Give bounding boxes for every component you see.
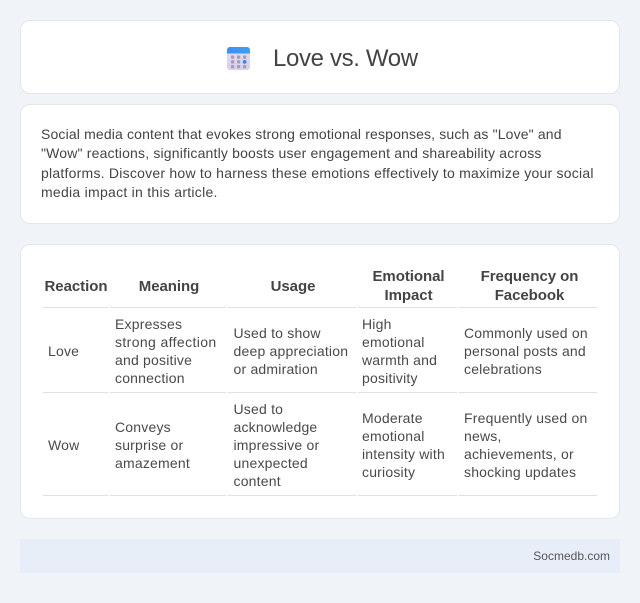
table row: Love: and positive — [115, 352, 192, 368]
table row: Wow: impressive or — [234, 437, 319, 453]
intro paragraph — [41, 126, 594, 200]
table row: Love: emotional — [362, 334, 425, 350]
intro paragraph: media impact in this article. — [41, 184, 218, 200]
intro paragraph: platforms. Discover how to harness these emotions effectively to maximize your social — [41, 165, 594, 181]
table row: Wow: news, — [464, 428, 502, 444]
table row: Wow: surprise or — [115, 437, 183, 453]
table row: Wow: Wow — [48, 437, 79, 453]
intro paragraph: Social media content that evokes strong emotional responses, such as "Love" and — [41, 126, 562, 142]
table header: Facebook — [495, 287, 564, 304]
table row: Wow: emotional — [362, 428, 425, 444]
icon: calendar — [227, 47, 250, 70]
table row: Wow: acknowledge — [234, 419, 317, 435]
table row: Love: Love — [48, 343, 79, 359]
table row: Wow: Frequently used on — [464, 410, 587, 426]
table row: Love: strong affection — [115, 334, 217, 350]
title: Love vs. Wow — [273, 45, 418, 72]
table row: Love: warmth and — [362, 352, 437, 368]
table row: Wow: unexpected — [234, 455, 308, 471]
table row: Wow: achievements, or — [464, 446, 574, 462]
table row: Love: connection — [115, 370, 185, 386]
table row: Wow: curiosity — [362, 464, 415, 480]
table row: Wow: intensity with — [362, 446, 445, 462]
table row: Wow: amazement — [115, 455, 190, 471]
panel: comparison table — [20, 244, 620, 519]
table row: Wow: Moderate — [362, 410, 423, 426]
table header — [45, 268, 578, 304]
panel: title card — [20, 20, 620, 94]
table row: Wow: Used to — [234, 401, 283, 417]
footer bar — [20, 539, 620, 573]
table row: Love: Commonly used on — [464, 325, 588, 341]
table row: Wow: shocking updates — [464, 464, 576, 480]
table row: Love: or admiration — [234, 361, 318, 377]
table header: Emotional — [372, 268, 445, 285]
panel: comparison table: content — [234, 473, 281, 489]
table row: Love: Used to show — [234, 325, 321, 341]
table header: Impact — [384, 287, 433, 304]
table header: Meaning — [139, 278, 199, 295]
table row: Love: celebrations — [464, 361, 542, 377]
table header: Frequency on — [481, 268, 578, 285]
table header: Reaction — [45, 278, 107, 295]
table row: Love: personal posts and — [464, 343, 586, 359]
table row: Love: Expresses — [115, 316, 182, 332]
table row: Wow — [48, 401, 587, 489]
panel: intro text — [20, 104, 620, 224]
footer source text: Socmedb.com — [533, 549, 610, 563]
table row: Love: High — [362, 316, 392, 332]
table row: Wow: Conveys — [115, 419, 171, 435]
table row: Love: positivity — [362, 370, 418, 386]
table row: Love: deep appreciation — [234, 343, 348, 359]
table header: Usage — [271, 278, 315, 295]
intro paragraph: "Wow" reactions, significantly boosts user engagement and shareability across — [41, 145, 542, 161]
table row: Love — [48, 316, 588, 386]
